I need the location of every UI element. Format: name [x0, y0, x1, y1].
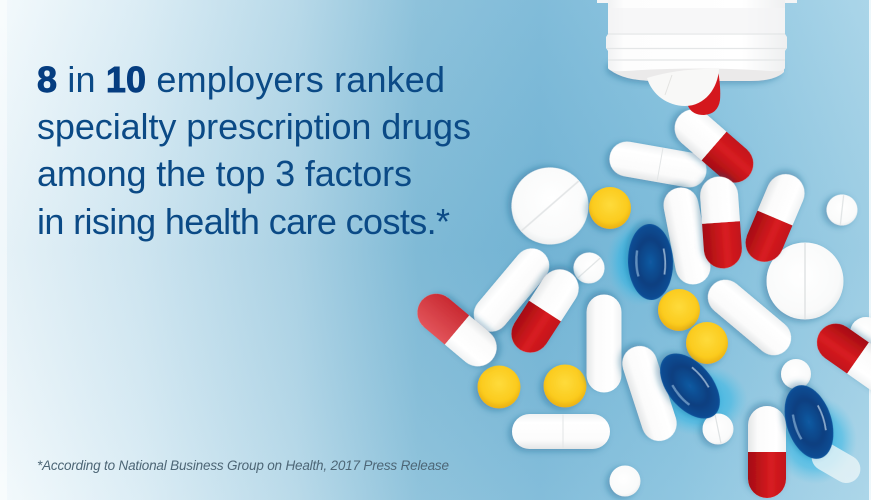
tablet: small lower	[702, 414, 734, 444]
red and white capsule F	[748, 406, 786, 498]
tablet: small plain right	[781, 359, 811, 389]
pale capsule under softgel	[806, 438, 866, 488]
tablet leaving bottle	[647, 69, 719, 106]
white capsule 6	[618, 341, 681, 446]
red and white capsule B	[699, 175, 743, 270]
red and white capsule E	[504, 262, 586, 360]
bottle body	[606, 0, 787, 71]
red and white capsule G	[809, 316, 871, 400]
tablet: large right	[766, 242, 844, 320]
red and white capsule A	[667, 101, 761, 191]
tablet: right edge	[850, 317, 871, 349]
red and white capsule C	[740, 168, 810, 268]
yellow ball 1	[589, 187, 631, 229]
tablet: small upper right	[822, 190, 862, 230]
headline: specialty prescription drugs	[37, 106, 471, 147]
white capsule 5	[701, 273, 798, 362]
blue softgel 1	[627, 223, 674, 301]
pill bottle	[597, 0, 797, 115]
white capsule 4	[586, 294, 622, 392]
headline: in rising health care costs.*	[37, 201, 450, 242]
yellow ball 2	[658, 289, 700, 331]
pills group	[410, 101, 871, 498]
headline: 8 in 10 employers ranked	[37, 59, 445, 100]
red capsule in bottle mouth	[688, 70, 720, 115]
yellow ball 3	[686, 322, 728, 364]
yellow ball 4	[478, 366, 520, 408]
bottle flange	[597, 0, 797, 3]
bottle ring edges	[607, 34, 786, 60]
tablet: large left	[496, 152, 604, 260]
tablet: small bottom	[610, 466, 640, 496]
glow: cyan reflections	[606, 218, 857, 484]
yellow ball 5	[544, 364, 586, 408]
red and white capsule D	[410, 286, 504, 374]
white capsule 1	[607, 139, 709, 190]
bottle upper shading	[608, 8, 785, 33]
footnote: *According to National Business Group on Health, 2017 Press Release	[37, 458, 449, 473]
white capsule 2	[660, 185, 714, 287]
white capsule 3	[467, 241, 556, 339]
headline	[37, 59, 471, 242]
blue softgel 2	[648, 342, 732, 430]
white capsule 7	[512, 414, 610, 449]
blue softgel 3	[776, 379, 842, 465]
bottle mouth interior	[610, 62, 784, 81]
headline: among the top 3 factors	[37, 153, 412, 194]
tablet: small mid	[568, 247, 610, 289]
